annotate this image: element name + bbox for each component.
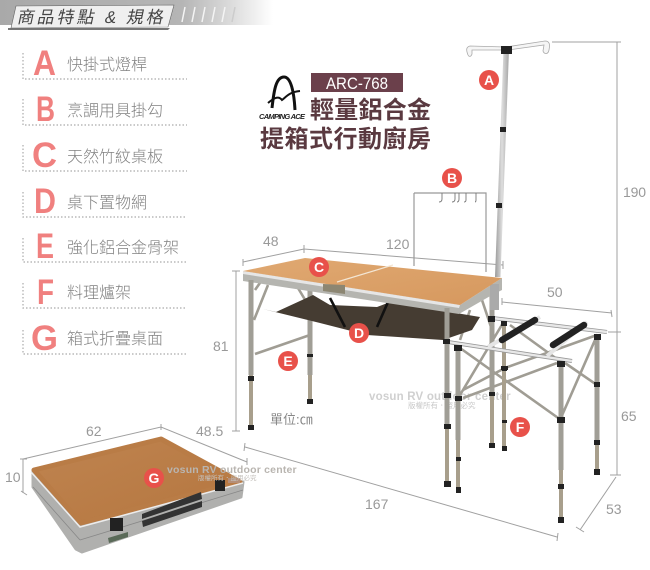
feature list xyxy=(23,44,187,358)
feature G: G xyxy=(31,319,58,358)
dimension labels: 65 xyxy=(621,408,637,424)
dimension labels: 10 xyxy=(5,469,21,485)
lantern pole xyxy=(467,41,550,277)
badge D: D xyxy=(354,325,364,341)
rack legs xyxy=(455,322,600,523)
watermark xyxy=(369,391,511,410)
badge C xyxy=(309,257,329,277)
feature A: 快掛式燈桿 xyxy=(67,56,147,74)
feature F: 料理爐架 xyxy=(67,284,131,302)
case handle xyxy=(142,492,202,527)
feature B xyxy=(23,90,187,129)
feature B: 烹調用具掛勾 xyxy=(67,102,163,120)
rack grips xyxy=(502,320,584,345)
leg braces xyxy=(254,280,492,354)
feature F xyxy=(23,273,187,312)
feature G xyxy=(23,319,187,358)
product title: 輕量鋁合金 xyxy=(310,96,431,124)
case wood top xyxy=(34,439,240,523)
product title: 提箱式行動廚房 xyxy=(260,125,431,153)
feature D xyxy=(23,182,187,221)
rack bars xyxy=(448,317,607,361)
net straps xyxy=(330,298,388,327)
feature B: B xyxy=(36,90,55,129)
rack braces xyxy=(460,323,597,420)
case latches xyxy=(110,480,225,531)
storage net xyxy=(263,295,480,340)
dimension labels: 50 xyxy=(547,284,563,300)
stove rack xyxy=(443,316,607,523)
feature E xyxy=(23,227,187,266)
dimension labels: 167 xyxy=(365,496,389,512)
rack joints xyxy=(443,316,601,370)
dimension labels: 190 xyxy=(623,184,646,200)
feature D: D xyxy=(34,182,56,221)
badge D xyxy=(349,323,369,343)
dimension labels: 62 xyxy=(86,423,102,439)
folded case xyxy=(31,439,243,552)
dimension labels: 48 xyxy=(263,233,279,249)
logo: Camping Ace xyxy=(259,77,306,121)
badge G xyxy=(144,468,164,488)
feature A: A xyxy=(33,44,56,83)
table top xyxy=(243,258,502,305)
case watermark xyxy=(167,464,297,482)
feature A xyxy=(23,44,187,83)
feature E: E xyxy=(36,227,54,266)
badge B: B xyxy=(447,170,457,186)
dimension labels xyxy=(5,184,646,517)
case watermark: 版權所有．盜用必究 xyxy=(198,473,257,482)
watermark: vosun RV outdoor center xyxy=(369,391,511,403)
feature F: F xyxy=(37,273,54,312)
feature E: 強化鋁合金骨架 xyxy=(67,239,179,257)
folding table xyxy=(243,258,502,487)
badge E xyxy=(278,351,298,371)
feature C: 天然竹紋桌板 xyxy=(67,148,163,166)
table latch xyxy=(323,284,345,294)
feature C xyxy=(23,136,187,175)
badge A: A xyxy=(484,72,494,88)
product title xyxy=(260,96,431,153)
badge C: C xyxy=(314,259,324,275)
feature D: 桌下置物網 xyxy=(67,194,147,212)
feature C: C xyxy=(32,136,57,175)
table split line xyxy=(337,265,393,282)
watermark: 版權所有．盜用必究 xyxy=(408,400,476,410)
dimension labels: 48.5 xyxy=(196,423,223,439)
badge E: E xyxy=(283,353,293,369)
dimension labels: 120 xyxy=(386,236,410,252)
badge A xyxy=(479,70,499,90)
badge F xyxy=(510,417,530,437)
feature G: 箱式折疊桌面 xyxy=(67,330,163,348)
hook rack xyxy=(414,193,486,272)
dimension labels: 53 xyxy=(606,501,622,517)
badge G: G xyxy=(149,470,160,486)
unit label: 單位:㎝ xyxy=(270,412,313,427)
model tag: ARC-768 xyxy=(326,74,388,93)
case watermark: vosun RV outdoor center xyxy=(167,464,297,476)
heading: features and specs: 商品特點 & 規格 xyxy=(16,7,166,27)
logo: Camping Ace: CAMPING ACE xyxy=(259,112,306,121)
badge B xyxy=(442,168,462,188)
front legs xyxy=(248,280,451,487)
header slashes xyxy=(182,7,235,22)
dimension labels: 81 xyxy=(213,338,229,354)
badge F: F xyxy=(516,419,525,435)
back legs xyxy=(307,288,495,448)
header banner xyxy=(0,0,650,30)
table edge xyxy=(243,271,502,314)
case plate xyxy=(108,532,128,543)
